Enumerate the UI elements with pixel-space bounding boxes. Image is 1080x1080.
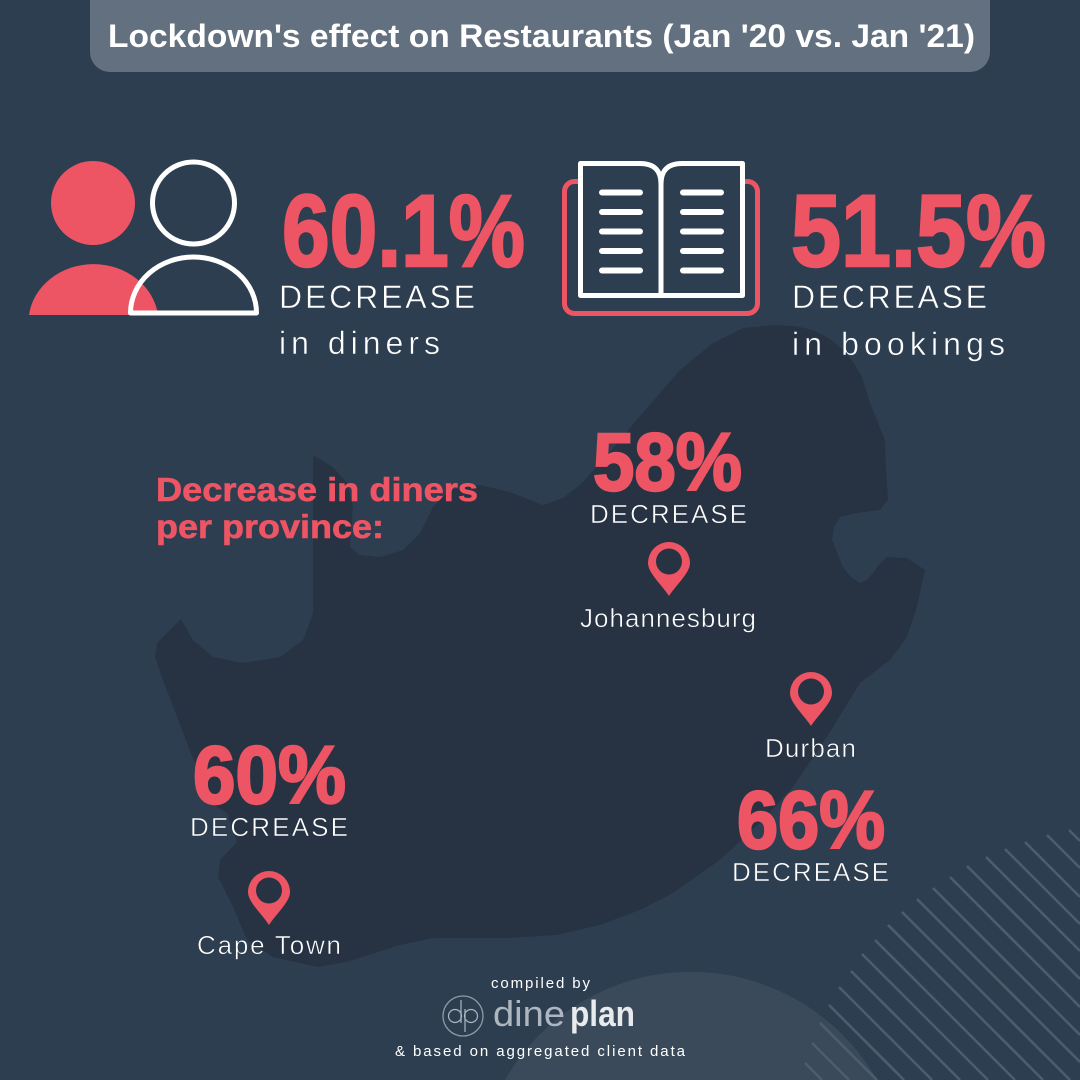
- logo: dineplan: plan: [570, 993, 635, 1034]
- stat: bookings: 51.5%: [791, 174, 1046, 288]
- stat: Cape Town: DECREASE: [190, 812, 348, 842]
- heading: decrease per province: per province:: [156, 508, 384, 545]
- stat: Johannesburg: 58%: [593, 417, 742, 508]
- stat: bookings: DECREASE: [792, 279, 987, 315]
- stat: diners: in diners: [279, 325, 440, 361]
- stat: Johannesburg: DECREASE: [590, 499, 747, 529]
- stat: Johannesburg: Johannesburg: [580, 603, 756, 633]
- stat: Durban: [732, 672, 889, 887]
- stat: Durban: DECREASE: [732, 857, 889, 887]
- stat: Johannesburg: [580, 417, 756, 633]
- icon: open book: [564, 164, 758, 314]
- footer credit: [395, 975, 686, 1060]
- icon: two people: [29, 161, 256, 315]
- icon: pin Johannesburg: [648, 542, 690, 596]
- footer credit: & based on aggregated client data: [395, 1043, 686, 1060]
- stat: diners: 60.1%: [282, 174, 525, 288]
- heading: decrease per province: Decrease in diners: [156, 471, 478, 508]
- icon: pin Durban: [790, 672, 832, 726]
- background circle: [505, 972, 877, 1080]
- logo: dineplan: dine: [493, 993, 565, 1034]
- stat: Cape Town: Cape Town: [197, 930, 341, 960]
- heading: decrease per province: [156, 471, 478, 545]
- icon: pin Cape Town: [248, 871, 290, 925]
- stat: bookings: [791, 174, 1046, 362]
- stat: Durban: Durban: [765, 733, 856, 763]
- stat: diners: DECREASE: [279, 279, 475, 315]
- footer credit: compiled by: [491, 975, 590, 992]
- stat: Cape Town: [190, 730, 348, 960]
- logo: dineplan: [443, 993, 635, 1036]
- stat: Durban: 66%: [737, 775, 885, 866]
- stat: Cape Town: 60%: [193, 730, 346, 821]
- title banner: [90, 0, 990, 72]
- stat: bookings: in bookings: [792, 326, 1005, 362]
- background diagonal stripes: [805, 830, 1080, 1080]
- title: Lockdown's effect on Restaurants (Jan '20 vs. Jan '21): [108, 18, 975, 54]
- stat: diners: [279, 174, 525, 361]
- map of South Africa silhouette: [155, 325, 925, 967]
